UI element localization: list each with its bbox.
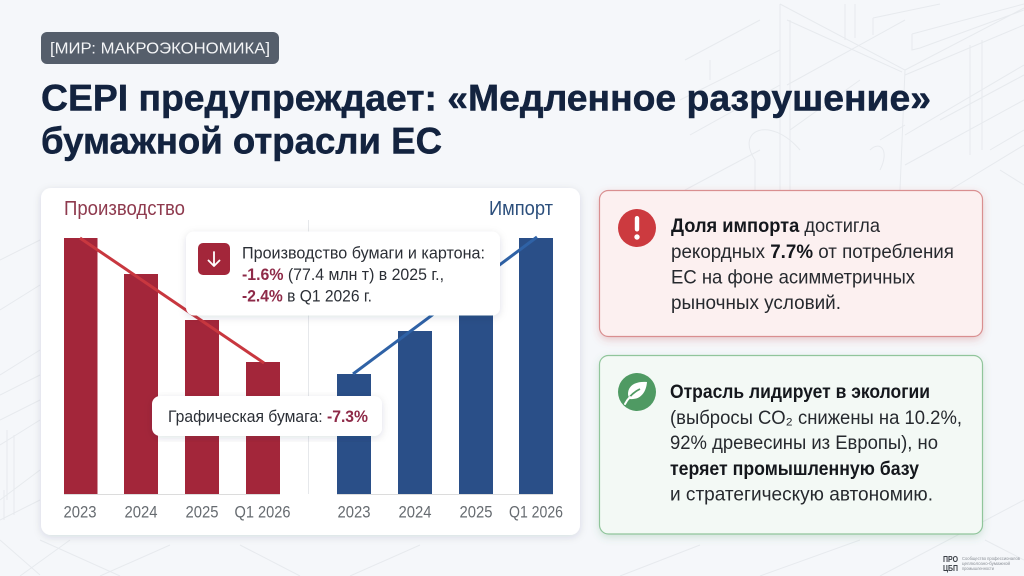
category badge: [МИР: МАКРОЭКОНОМИКА] [50, 40, 270, 58]
year labels [64, 504, 563, 522]
alert text [671, 215, 954, 314]
icon: exclamation [618, 209, 656, 247]
year labels: 2025 [460, 504, 492, 522]
ecology text: (выбросы CO₂ снижены на 10.2%, [670, 407, 962, 429]
alert text: ЕС на фоне асимметричных [671, 266, 915, 288]
trend line: import [353, 237, 537, 374]
alert text: рекордных 7.7% от потребления [671, 241, 954, 263]
title: бумажной отрасли ЕС [41, 120, 442, 162]
logo: Сообщество профессионалов [962, 556, 1021, 561]
trend line: production [80, 238, 264, 363]
callout: graphic paper: Графическая бумага: -7.3% [168, 407, 368, 426]
year labels: 2025 [186, 504, 218, 522]
ecology text: Отрасль лидирует в экологии [670, 381, 930, 403]
callout: production of paper and board [186, 232, 500, 316]
title: CEPI предупреждает: «Медленное разрушение» [41, 78, 931, 118]
ecology text: и стратегическую автономию. [670, 484, 933, 506]
ecology text: 92% древесины из Европы), но [670, 432, 938, 454]
alert text: рыночных условий. [671, 292, 841, 314]
callout text: -1.6% (77.4 млн т) в 2025 г., [242, 265, 444, 284]
panel: chart card [41, 188, 580, 535]
year labels: 2023 [338, 504, 370, 522]
panel: ecology note [600, 356, 982, 534]
callout text [242, 244, 485, 306]
logo: промышленности [962, 566, 995, 571]
callout text: -2.4% в Q1 2026 г. [242, 286, 372, 306]
bar chart: import [337, 238, 553, 494]
alert text: Доля импорта достигла [671, 215, 880, 237]
year labels: 2024 [398, 504, 432, 522]
icon: down arrow [198, 243, 230, 275]
ecology text: теряет промышленную базу [670, 458, 919, 480]
ecology text [670, 381, 962, 506]
title [41, 78, 931, 162]
year labels: 2023 [64, 504, 96, 522]
heading: import: Импорт [489, 198, 553, 220]
panel: import share alert [600, 190, 982, 336]
year labels: Q1 2026 [234, 504, 290, 522]
icon: leaf [618, 373, 656, 411]
year labels: 2024 [124, 504, 158, 522]
callout text: Производство бумаги и картона: [242, 244, 485, 262]
logo: ЦБП [943, 564, 958, 573]
bar chart: production [64, 238, 280, 494]
logo [943, 555, 1021, 573]
category badge [41, 32, 279, 64]
heading: production: Производство [64, 198, 185, 220]
logo: целлюлозно-бумажной [962, 561, 1011, 566]
callout: graphic paper [152, 396, 382, 436]
year labels: Q1 2026 [509, 504, 563, 522]
logo: ПРО [943, 555, 958, 564]
